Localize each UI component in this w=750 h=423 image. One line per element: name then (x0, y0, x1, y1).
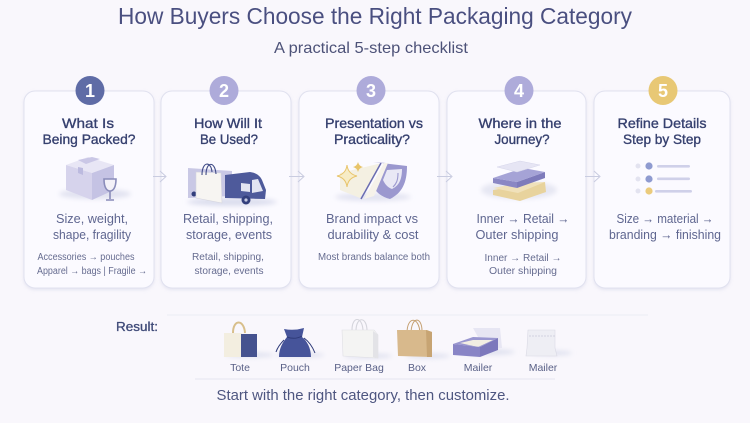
step 1 note: Apparel → bags | Fragile → (37, 266, 147, 277)
label: pouch: Pouch (280, 362, 310, 374)
step 1 note: Accessories → pouches (38, 252, 134, 263)
step 4 note: Inner → Retail → (484, 253, 562, 264)
icon: paper bag (342, 320, 392, 358)
step 1 description: shape, fragility (53, 227, 131, 242)
step 2 note: storage, events (194, 266, 264, 277)
step 2 description: Retail, shipping, (183, 211, 273, 226)
step 5 heading: Refine Details (618, 115, 706, 131)
step 3 description: Brand impact vs (326, 211, 418, 226)
icon: paper mailer (526, 330, 572, 356)
icon: kraft bag (397, 320, 450, 358)
arrow: step 3 to 4 (437, 171, 452, 182)
icon: open mailer box (453, 328, 515, 357)
step 5 badge: 5 (658, 81, 668, 101)
step 2 badge: 2 (219, 81, 229, 101)
arrow: step 4 to 5 (585, 171, 600, 182)
label: tote: Tote (230, 362, 250, 374)
step 4 note: Outer shipping (489, 266, 557, 277)
step 3 description: durability & cost (328, 227, 419, 242)
icon: stacked packaging layers (481, 161, 557, 201)
step 1 badge (76, 76, 104, 105)
step 2 heading: How Will It (194, 115, 262, 131)
step 1 badge: 1 (85, 81, 95, 101)
panel: step 3 (299, 76, 439, 288)
icon: tote (224, 322, 274, 358)
step 4 heading: Where in the (478, 115, 562, 131)
step 1 heading: Being Packed? (42, 131, 136, 147)
icon: pouch (276, 328, 324, 358)
step 2 heading: Be Used? (200, 131, 258, 147)
step 3 badge (356, 76, 386, 105)
step 3 note: Most brands balance both (318, 252, 430, 263)
step 2 description: storage, events (186, 227, 272, 242)
closing line: Start with the right category, then customize. (216, 388, 510, 404)
step 5 heading: Step by Step (623, 131, 701, 147)
panel: step 5 (594, 76, 730, 288)
result label: Result: (116, 319, 158, 334)
step 2 badge (210, 76, 238, 105)
step 3 badge: 3 (366, 81, 376, 101)
label: mailer 2: Mailer (529, 362, 558, 374)
icon: box with fragile glass (59, 157, 131, 200)
step 1 heading: What Is (62, 115, 114, 131)
icon: checklist dots (636, 162, 692, 195)
icon: shopping bag and delivery truck (187, 164, 277, 206)
step 4 description: Inner → Retail → (476, 211, 570, 226)
step 4 badge: 4 (514, 81, 524, 101)
arrow: step 1 to 2 (153, 171, 166, 182)
arrow: step 2 to 3 (289, 171, 304, 182)
label: box: Box (408, 362, 427, 374)
label: paper bag: Paper Bag (334, 362, 384, 374)
step 5 description: branding → finishing (609, 227, 721, 242)
title: How Buyers Choose the Right Packaging Category (118, 3, 632, 29)
label: mailer: Mailer (464, 362, 493, 374)
step 5 badge (648, 76, 678, 105)
step 4 description: Outer shipping (476, 227, 558, 242)
panel: step 1 (24, 76, 154, 288)
step 3 heading: Presentation vs (325, 115, 423, 131)
step 5 description: Size → material → (616, 211, 714, 226)
step 4 heading: Journey? (494, 131, 550, 147)
result row: packaging types (224, 320, 572, 374)
panel: step 2 (161, 76, 291, 288)
step 1 description: Size, weight, (56, 211, 128, 226)
step 4 badge (504, 76, 534, 105)
panel: step 4 (447, 76, 586, 288)
step 3 heading: Practicality? (334, 131, 410, 147)
icon: sparkle and shield (335, 162, 411, 201)
subtitle: A practical 5-step checklist (274, 40, 469, 57)
step 2 note: Retail, shipping, (192, 252, 264, 263)
